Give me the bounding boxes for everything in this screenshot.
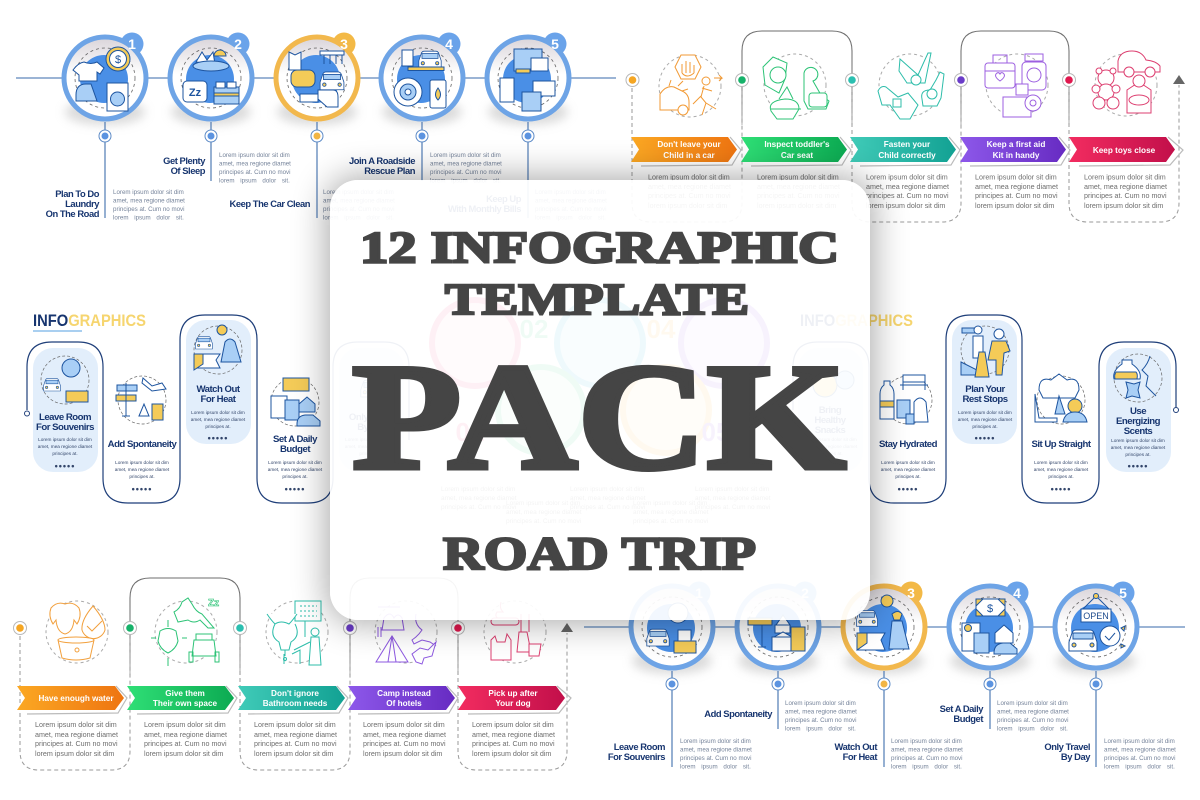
step 2 text: lorem ipsum dolor sit. xyxy=(785,726,856,732)
step 3 text: lorem ipsum dolor sit. xyxy=(323,214,394,222)
card: leave room for souvenirs: amet, mea regione diamet xyxy=(38,444,93,449)
brand heading: INFOGRAPHICS xyxy=(800,311,913,330)
step 3 circle icon: heat: 3 xyxy=(907,585,915,601)
card: stay hydrated: amet, mea regione diamet xyxy=(881,467,936,472)
card: sit up straight: Lorem ipsum dolor sit dim xyxy=(1034,460,1088,465)
card: use energizing scents: ••••• xyxy=(1128,461,1148,471)
descriptions: amet, mea regione diamet xyxy=(144,731,227,739)
descriptions: Lorem ipsum dolor sit dim xyxy=(144,721,226,729)
card: plan your rest stops xyxy=(958,326,1013,443)
step 2 text: Lorem ipsum dolor sit dim xyxy=(785,700,856,707)
step 1 text: Plan To Do xyxy=(55,188,100,199)
infographic: driver comfort cards (middle right) xyxy=(793,311,1178,503)
icon: fastening seat belts xyxy=(878,53,944,119)
step 1 text: Leave Room xyxy=(614,741,665,752)
step 4 text: Lorem ipsum dolor sit dim xyxy=(997,700,1068,707)
card: watch out for heat: amet, mea regione diamet xyxy=(191,417,246,422)
card: use energizing scents: Energizing xyxy=(1116,416,1161,427)
descriptions: principes at. Cum no movi xyxy=(35,740,118,748)
descriptions: amet, mea regione diamet xyxy=(35,731,118,739)
step 3 text: Watch Out xyxy=(835,741,877,752)
descriptions: principes at. Cum no movi xyxy=(1084,192,1167,200)
card: use energizing scents: amet, mea regione diamet xyxy=(1111,445,1166,450)
descriptions: Lorem ipsum dolor sit dim xyxy=(757,174,839,182)
card: stay hydrated: Stay Hydrated xyxy=(879,439,938,450)
faint circular infographic behind the title panel: amet, mea regione diamet xyxy=(506,509,582,516)
chevron: first aid kit xyxy=(960,137,1070,166)
step 1 circle icon: souvenirs xyxy=(631,582,713,674)
step 2 text xyxy=(704,700,857,732)
step 3 text: Lorem ipsum dolor sit dim xyxy=(323,189,394,196)
card: plan your rest stops: Plan Your xyxy=(965,384,1005,395)
card: plan your rest stops: ••••• xyxy=(975,433,995,443)
card: use energizing scents: Scents xyxy=(1124,426,1152,437)
infographic: travel planning cards (middle left) xyxy=(24,311,409,503)
step 4 text: lorem ipsum dolor sit. xyxy=(430,178,501,184)
descriptions xyxy=(648,174,1167,210)
step 5 circle icon: open sign, car and clock xyxy=(1055,582,1137,674)
card: watch out for heat: For Heat xyxy=(201,394,237,405)
faint circular infographic behind the title panel: 02 xyxy=(520,314,548,344)
arrow head xyxy=(1173,75,1185,84)
descriptions: lorem ipsum dolor sit dim xyxy=(757,202,836,210)
card: leave room for souvenirs: ••••• xyxy=(55,461,75,471)
card: stay hydrated: Lorem ipsum dolor sit dim xyxy=(881,460,935,465)
step 2 text: Add Spontaneity xyxy=(704,708,773,719)
step 1 text: lorem ipsum dolor sit. xyxy=(113,214,184,222)
chevron: give them their own space: Give them xyxy=(165,689,205,698)
step 1 text: principes at. Cum no movi xyxy=(113,206,185,213)
faint circular infographic behind the title panel: principes at. Cum no movi xyxy=(633,518,708,525)
chevron: camp instead of hotels xyxy=(348,686,458,714)
step 4 circle icon: budget: 4 xyxy=(1013,585,1021,601)
descriptions: lorem ipsum dolor sit dim xyxy=(254,750,333,758)
frames and dashed connectors xyxy=(20,578,567,770)
step 3 circle icon: heat xyxy=(843,582,925,674)
step 1 text xyxy=(608,738,752,770)
card frame path xyxy=(793,315,1176,503)
faint circular infographic behind the title panel: principes at. Cum no movi xyxy=(570,504,645,511)
step 1 circle icon: laundry: 1 xyxy=(128,36,136,52)
faint circular infographic behind the title panel: amet, mea regione diamet xyxy=(441,495,517,502)
card: add spontaneity xyxy=(108,376,178,494)
faint circular infographic behind the title panel: 01 xyxy=(456,417,484,447)
descriptions: lorem ipsum dolor sit dim xyxy=(975,202,1054,210)
step 1 text: lorem ipsum dolor sit. xyxy=(680,764,751,770)
descriptions: principes at. Cum no movi xyxy=(975,192,1058,200)
step 2 text: Of Sleep xyxy=(171,165,206,176)
faint circular infographic behind the title panel: Lorem ipsum dolor sit dim xyxy=(506,500,580,507)
step 1 text: Laundry xyxy=(65,198,100,209)
descriptions: principes at. Cum no movi xyxy=(757,192,840,200)
step 1 text: amet, mea regione diamet xyxy=(680,746,752,754)
card: sit up straight: amet, mea regione diamet xyxy=(1034,467,1089,472)
step 5 text: amet, mea regione diamet xyxy=(1104,746,1176,754)
descriptions: amet, mea regione diamet xyxy=(254,731,337,739)
brand heading: INFOGRAPHICS xyxy=(33,311,146,330)
chevron: don't leave your child: Child in a car xyxy=(663,151,716,160)
card: add spontaneity: Add Spontaneity xyxy=(108,439,178,450)
step 5 text: By Day xyxy=(1061,751,1091,762)
step 1 circle icon: laundry: $ xyxy=(115,54,121,66)
step 2 text: amet, mea regione diamet xyxy=(785,708,857,716)
chevron: camp instead of hotels: Of hotels xyxy=(386,699,422,708)
card: leave room for souvenirs: Leave Room xyxy=(39,412,91,423)
step 4 circle icon: budget xyxy=(949,582,1031,674)
card: set a daily budget xyxy=(268,378,323,494)
step 5 text: With Monthly Bills xyxy=(448,203,521,214)
card: leave room for souvenirs xyxy=(36,356,94,471)
step 4 text: amet, mea regione diamet xyxy=(430,160,502,168)
card: plan your rest stops: amet, mea regione diamet xyxy=(958,417,1013,422)
step 4 text: principes at. Cum no movi xyxy=(997,717,1069,724)
timeline line xyxy=(584,626,1185,628)
descriptions: amet, mea regione diamet xyxy=(472,731,555,739)
card: bring healthy snacks (behind panel): Bring xyxy=(819,405,842,416)
card: add spontaneity: Lorem ipsum dolor sit dim xyxy=(115,460,169,465)
card: watch out for heat xyxy=(191,325,246,443)
card: only travel by day (behind panel): amet, mea regione diamet xyxy=(345,444,400,449)
step 5 text: principes at. Cum no movi xyxy=(1104,755,1176,762)
faint circular infographic behind the title panel: Lorem ipsum dolor sit dim xyxy=(695,486,769,493)
icon: dog and space xyxy=(151,598,219,666)
step 4 text: Lorem ipsum dolor sit dim xyxy=(430,152,501,159)
step 3 text xyxy=(230,189,395,222)
card: plan your rest stops: Rest Stops xyxy=(962,394,1008,405)
faint circular infographic behind the title panel: amet, mea regione diamet xyxy=(570,495,646,502)
card: set a daily budget: amet, mea regione diamet xyxy=(268,467,323,472)
descriptions: Lorem ipsum dolor sit dim xyxy=(35,721,117,729)
icon: dog and space: Zz xyxy=(208,598,219,609)
step 4 circle icon: roadside rescue xyxy=(381,32,463,125)
descriptions: principes at. Cum no movi xyxy=(866,192,949,200)
icon: first aid kit, medicine, toilet paper xyxy=(985,54,1048,117)
step 2 circle icon: sleep xyxy=(170,32,252,125)
card: use energizing scents: Use xyxy=(1130,406,1146,417)
chevron: pick up after your dog xyxy=(458,686,571,714)
chevron: keep toys close xyxy=(1069,137,1183,166)
descriptions: Lorem ipsum dolor sit dim xyxy=(363,721,445,729)
icon: bathroom needs xyxy=(266,601,328,665)
step 1 text xyxy=(46,188,185,222)
step 3 text: lorem ipsum dolor sit. xyxy=(891,764,962,770)
descriptions: principes at. Cum no movi xyxy=(144,740,227,748)
step 1 text: principes at. Cum no movi xyxy=(680,755,752,762)
card: set a daily budget: ••••• xyxy=(285,484,305,494)
step 2 circle icon: spontaneity: 2 xyxy=(801,585,809,601)
faint circular infographic behind the title panel: principes at. Cum no movi xyxy=(441,504,516,511)
card: plan your rest stops: principes at. xyxy=(972,424,998,429)
step 3 text: Keep The Car Clean xyxy=(230,198,311,209)
descriptions xyxy=(35,721,555,758)
step 2 circle icon: sleep: 2 xyxy=(234,36,242,52)
descriptions: Lorem ipsum dolor sit dim xyxy=(975,174,1057,182)
connector nodes and stems xyxy=(99,122,534,218)
heading: road trip: ROAD TRIP xyxy=(443,528,756,580)
chevron: first aid kit: Kit in handy xyxy=(993,151,1040,160)
arrow head xyxy=(561,623,573,632)
descriptions: Lorem ipsum dolor sit dim xyxy=(866,174,948,182)
descriptions: Lorem ipsum dolor sit dim xyxy=(254,721,336,729)
step 3 text: principes at. Cum no movi xyxy=(891,755,963,762)
step 2 text: Get Plenty xyxy=(163,155,206,166)
chevron: camp instead of hotels: Camp instead xyxy=(377,689,431,698)
card: stay hydrated: ••••• xyxy=(898,484,918,494)
step 4 text: Set A Daily xyxy=(940,703,984,714)
step 2 text: principes at. Cum no movi xyxy=(785,717,857,724)
chevron: give them their own space: Their own space xyxy=(153,699,218,708)
icon: camp instead of hotels xyxy=(375,601,437,664)
heading: 12 infographic: 12 INFOGRAPHIC xyxy=(360,223,839,272)
chevron: don't ignore bathroom needs: Don't ignore xyxy=(271,689,319,698)
step 5 circle icon: monthly bills: 5 xyxy=(551,36,559,52)
card: use energizing scents: principes at. xyxy=(1125,452,1151,457)
chevron: inspect car seat: Inspect toddler's xyxy=(764,140,830,149)
faint circular infographic behind the title panel: Lorem ipsum dolor sit dim xyxy=(441,486,515,493)
connector nodes and stems xyxy=(666,671,1102,767)
chevron: don't ignore bathroom needs: Bathroom needs xyxy=(263,699,328,708)
chevron: pick up after your dog: Pick up after xyxy=(488,689,538,698)
chevron: have enough water: Have enough water xyxy=(38,694,114,703)
card: use energizing scents: Lorem ipsum dolor sit dim xyxy=(1111,438,1165,443)
card: bring healthy snacks (behind panel): amet, mea regione diamet xyxy=(803,444,858,449)
step 4 circle icon: roadside rescue: 4 xyxy=(445,36,453,52)
step 1 text: amet, mea regione diamet xyxy=(113,198,185,204)
step 3 text: Lorem ipsum dolor sit dim xyxy=(891,738,962,745)
step 4 text: amet, mea regione diamet xyxy=(997,708,1069,716)
descriptions: amet, mea regione diamet xyxy=(757,183,840,191)
card: stay hydrated xyxy=(879,375,938,494)
chevron: don't ignore bathroom needs xyxy=(238,686,348,714)
card: watch out for heat: principes at. xyxy=(205,424,231,429)
step 2 text: Lorem ipsum dolor sit dim xyxy=(219,152,290,159)
descriptions: lorem ipsum dolor sit dim xyxy=(648,202,727,210)
descriptions: lorem ipsum dolor sit dim xyxy=(363,750,442,758)
descriptions: principes at. Cum no movi xyxy=(472,740,555,748)
descriptions: lorem ipsum dolor sit dim xyxy=(1084,202,1163,210)
card: set a daily budget: principes at. xyxy=(282,474,308,479)
step 4 text: lorem ipsum dolor sit. xyxy=(997,726,1068,732)
descriptions: amet, mea regione diamet xyxy=(866,183,949,191)
infographic: traveling with dog chevrons (bottom left) xyxy=(14,578,573,770)
step 4 circle icon: budget: $ xyxy=(987,603,993,615)
heading underline xyxy=(33,330,82,332)
step 4 text: Join A Roadside xyxy=(349,155,415,166)
card: set a daily budget: Budget xyxy=(280,444,311,455)
infographic: child car safety chevrons (top right) xyxy=(626,31,1185,222)
step 1 text: Lorem ipsum dolor sit dim xyxy=(113,189,184,196)
card: watch out for heat: Lorem ipsum dolor sit dim xyxy=(191,410,245,415)
card backgrounds xyxy=(798,320,1171,472)
card: add spontaneity: amet, mea regione diamet xyxy=(115,467,170,472)
chevron: inspect car seat: Car seat xyxy=(781,151,813,160)
card: watch out for heat: ••••• xyxy=(208,433,228,443)
chevron: fasten child xyxy=(850,137,960,166)
card: watch out for heat: Watch Out xyxy=(196,384,241,395)
step 1 text: For Souvenirs xyxy=(608,751,665,762)
card: bring healthy snacks (behind panel): principes at. xyxy=(817,451,843,456)
step 5 text: lorem ipsum dolor sit. xyxy=(1104,764,1175,770)
card: only travel by day (behind panel): By Day xyxy=(357,422,388,433)
step 5 text: Lorem ipsum dolor sit dim xyxy=(1104,738,1175,745)
step 5 text: Only Travel xyxy=(1044,741,1090,752)
frame end node xyxy=(24,411,30,416)
card: bring healthy snacks (behind panel): Healthy xyxy=(814,415,847,426)
heading: pack: PACK xyxy=(352,333,846,501)
card: leave room for souvenirs: Lorem ipsum dolor sit dim xyxy=(38,437,92,442)
step 3 text xyxy=(835,738,963,770)
step 5 circle icon: open sign, car and clock: 5 xyxy=(1119,585,1127,601)
card: add spontaneity: ••••• xyxy=(132,484,152,494)
descriptions: amet, mea regione diamet xyxy=(648,183,731,191)
step 4 text: principes at. Cum no movi xyxy=(430,169,502,176)
card: sit up straight xyxy=(1031,374,1092,494)
central translucent title panel xyxy=(330,180,870,620)
card: only travel by day (behind panel): Lorem ipsum dolor sit dim xyxy=(345,437,399,442)
card: leave room for souvenirs: principes at. xyxy=(52,451,78,456)
step 5 circle icon: open sign, car and clock: OPEN xyxy=(1083,611,1109,621)
step 3 circle icon: car clean xyxy=(276,32,358,125)
card: stay hydrated: principes at. xyxy=(895,474,921,479)
faint circular infographic behind the title panel: Lorem ipsum dolor sit dim xyxy=(570,486,644,493)
chevron: inspect car seat xyxy=(741,137,851,166)
step 3 text: amet, mea regione diamet xyxy=(323,198,395,204)
descriptions: amet, mea regione diamet xyxy=(975,183,1058,191)
step 1 text: On The Road xyxy=(46,208,100,219)
step 5 text: Keep Up xyxy=(486,193,522,204)
faint circular infographic behind the title panel: 05 xyxy=(702,417,730,447)
icon: toys, teddy bear, toy car xyxy=(1092,51,1160,116)
step 2 text: principes at. Cum no movi xyxy=(219,169,291,176)
card: use energizing scents xyxy=(1111,354,1166,471)
card backgrounds xyxy=(33,320,404,472)
step 5 text: principes at. Cum no movi xyxy=(535,206,607,213)
faint circular infographic behind the title panel: principes at. Cum no movi xyxy=(695,504,770,511)
faint circular infographic behind the title panel: principes at. Cum no movi xyxy=(506,518,581,525)
chevron: don't leave your child: Don't leave your xyxy=(657,140,721,149)
card: bring healthy snacks (behind panel) xyxy=(803,371,858,456)
faint circular infographic behind the title panel: Lorem ipsum dolor sit dim xyxy=(633,500,707,507)
card: sit up straight: ••••• xyxy=(1051,484,1071,494)
faint circular infographic behind the title panel xyxy=(432,300,771,525)
faint circular infographic behind the title panel: 04 xyxy=(647,314,676,344)
step 1 circle icon: laundry xyxy=(64,32,146,125)
chevron: keep toys close: Keep toys close xyxy=(1093,146,1156,155)
descriptions: lorem ipsum dolor sit dim xyxy=(35,750,114,758)
chevron: don't leave your child xyxy=(631,137,741,166)
nodes xyxy=(14,622,464,634)
chevron: have enough water xyxy=(17,686,127,714)
frames and dashed connectors xyxy=(632,31,1179,222)
step 3 circle icon: car clean: 3 xyxy=(340,36,348,52)
step 3 text: For Heat xyxy=(843,751,877,762)
card: only travel by day (behind panel): Only Travel xyxy=(349,412,395,423)
card: set a daily budget: Set A Daily xyxy=(273,434,318,445)
card: only travel by day (behind panel) xyxy=(345,380,400,456)
card: only travel by day (behind panel): principes at. xyxy=(359,451,385,456)
step 2 text: amet, mea regione diamet xyxy=(219,160,291,168)
descriptions: lorem ipsum dolor sit dim xyxy=(472,750,551,758)
icon: dog, water drop, bowl xyxy=(46,601,108,663)
descriptions: Lorem ipsum dolor sit dim xyxy=(1084,174,1166,182)
step 4 text: Budget xyxy=(953,713,983,724)
frame end node xyxy=(1174,408,1178,412)
step 5 text: Lorem ipsum dolor sit dim xyxy=(535,189,606,196)
faint circular infographic behind the title panel: amet, mea regione diamet xyxy=(633,509,709,516)
step 5 text: lorem ipsum dolor sit. xyxy=(535,214,606,222)
descriptions: principes at. Cum no movi xyxy=(648,192,731,200)
descriptions: amet, mea regione diamet xyxy=(363,731,446,739)
icon: toddler car seats xyxy=(763,54,829,119)
step 4 text xyxy=(940,700,1069,732)
card: sit up straight: Sit Up Straight xyxy=(1031,439,1092,450)
chevron: fasten child: Child correctly xyxy=(878,151,936,160)
step 5 text: amet, mea regione diamet xyxy=(535,198,607,204)
chevron: fasten child: Fasten your xyxy=(884,140,931,149)
card: sit up straight: principes at. xyxy=(1048,474,1074,479)
chevron: pick up after your dog: Your dog xyxy=(495,699,531,708)
card: set a daily budget: Lorem ipsum dolor sit dim xyxy=(268,460,322,465)
step 1 text: Lorem ipsum dolor sit dim xyxy=(680,738,751,745)
card frame path xyxy=(27,315,409,503)
step 5 text xyxy=(448,189,607,222)
step 3 text: principes at. Cum no movi xyxy=(323,206,395,213)
infographic: laundry and road care timeline (top left) xyxy=(16,32,616,222)
icon: stop hand, car, running child xyxy=(659,55,722,117)
step 4 text xyxy=(349,152,502,184)
card: leave room for souvenirs: For Souvenirs xyxy=(36,422,94,433)
chevron: give them their own space xyxy=(127,686,237,714)
step 5 circle icon: monthly bills xyxy=(487,32,569,125)
descriptions: lorem ipsum dolor sit dim xyxy=(144,750,223,758)
infographic: road trip tips timeline (bottom right) xyxy=(584,582,1185,770)
step 4 text: Rescue Plan xyxy=(364,165,416,176)
card: plan your rest stops: Lorem ipsum dolor sit dim xyxy=(958,410,1012,415)
heading: template: TEMPLATE xyxy=(445,275,749,324)
step 2 text xyxy=(163,152,291,184)
step 2 circle icon: sleep: Zz xyxy=(189,87,202,99)
descriptions: Lorem ipsum dolor sit dim xyxy=(648,174,730,182)
step 2 text: lorem ipsum dolor sit. xyxy=(219,178,290,184)
step 2 circle icon: spontaneity xyxy=(737,582,819,674)
chevron: first aid kit: Keep a first aid xyxy=(987,140,1045,149)
descriptions: amet, mea regione diamet xyxy=(1084,183,1167,191)
descriptions: principes at. Cum no movi xyxy=(254,740,337,748)
descriptions: lorem ipsum dolor sit dim xyxy=(866,202,945,210)
step 1 circle icon: souvenirs: 1 xyxy=(695,585,703,601)
nodes xyxy=(626,74,1076,86)
timeline line xyxy=(16,77,616,79)
card: bring healthy snacks (behind panel): Snacks xyxy=(815,425,845,436)
step 3 text: amet, mea regione diamet xyxy=(891,746,963,754)
faint circular infographic behind the title panel: amet, mea regione diamet xyxy=(695,495,771,502)
descriptions: Lorem ipsum dolor sit dim xyxy=(472,721,554,729)
card: bring healthy snacks (behind panel): Lorem ipsum dolor sit dim xyxy=(803,437,857,442)
step 5 text xyxy=(1044,738,1176,770)
icon: pick up after dog xyxy=(484,601,546,663)
card: add spontaneity: principes at. xyxy=(129,474,155,479)
descriptions: principes at. Cum no movi xyxy=(363,740,446,748)
